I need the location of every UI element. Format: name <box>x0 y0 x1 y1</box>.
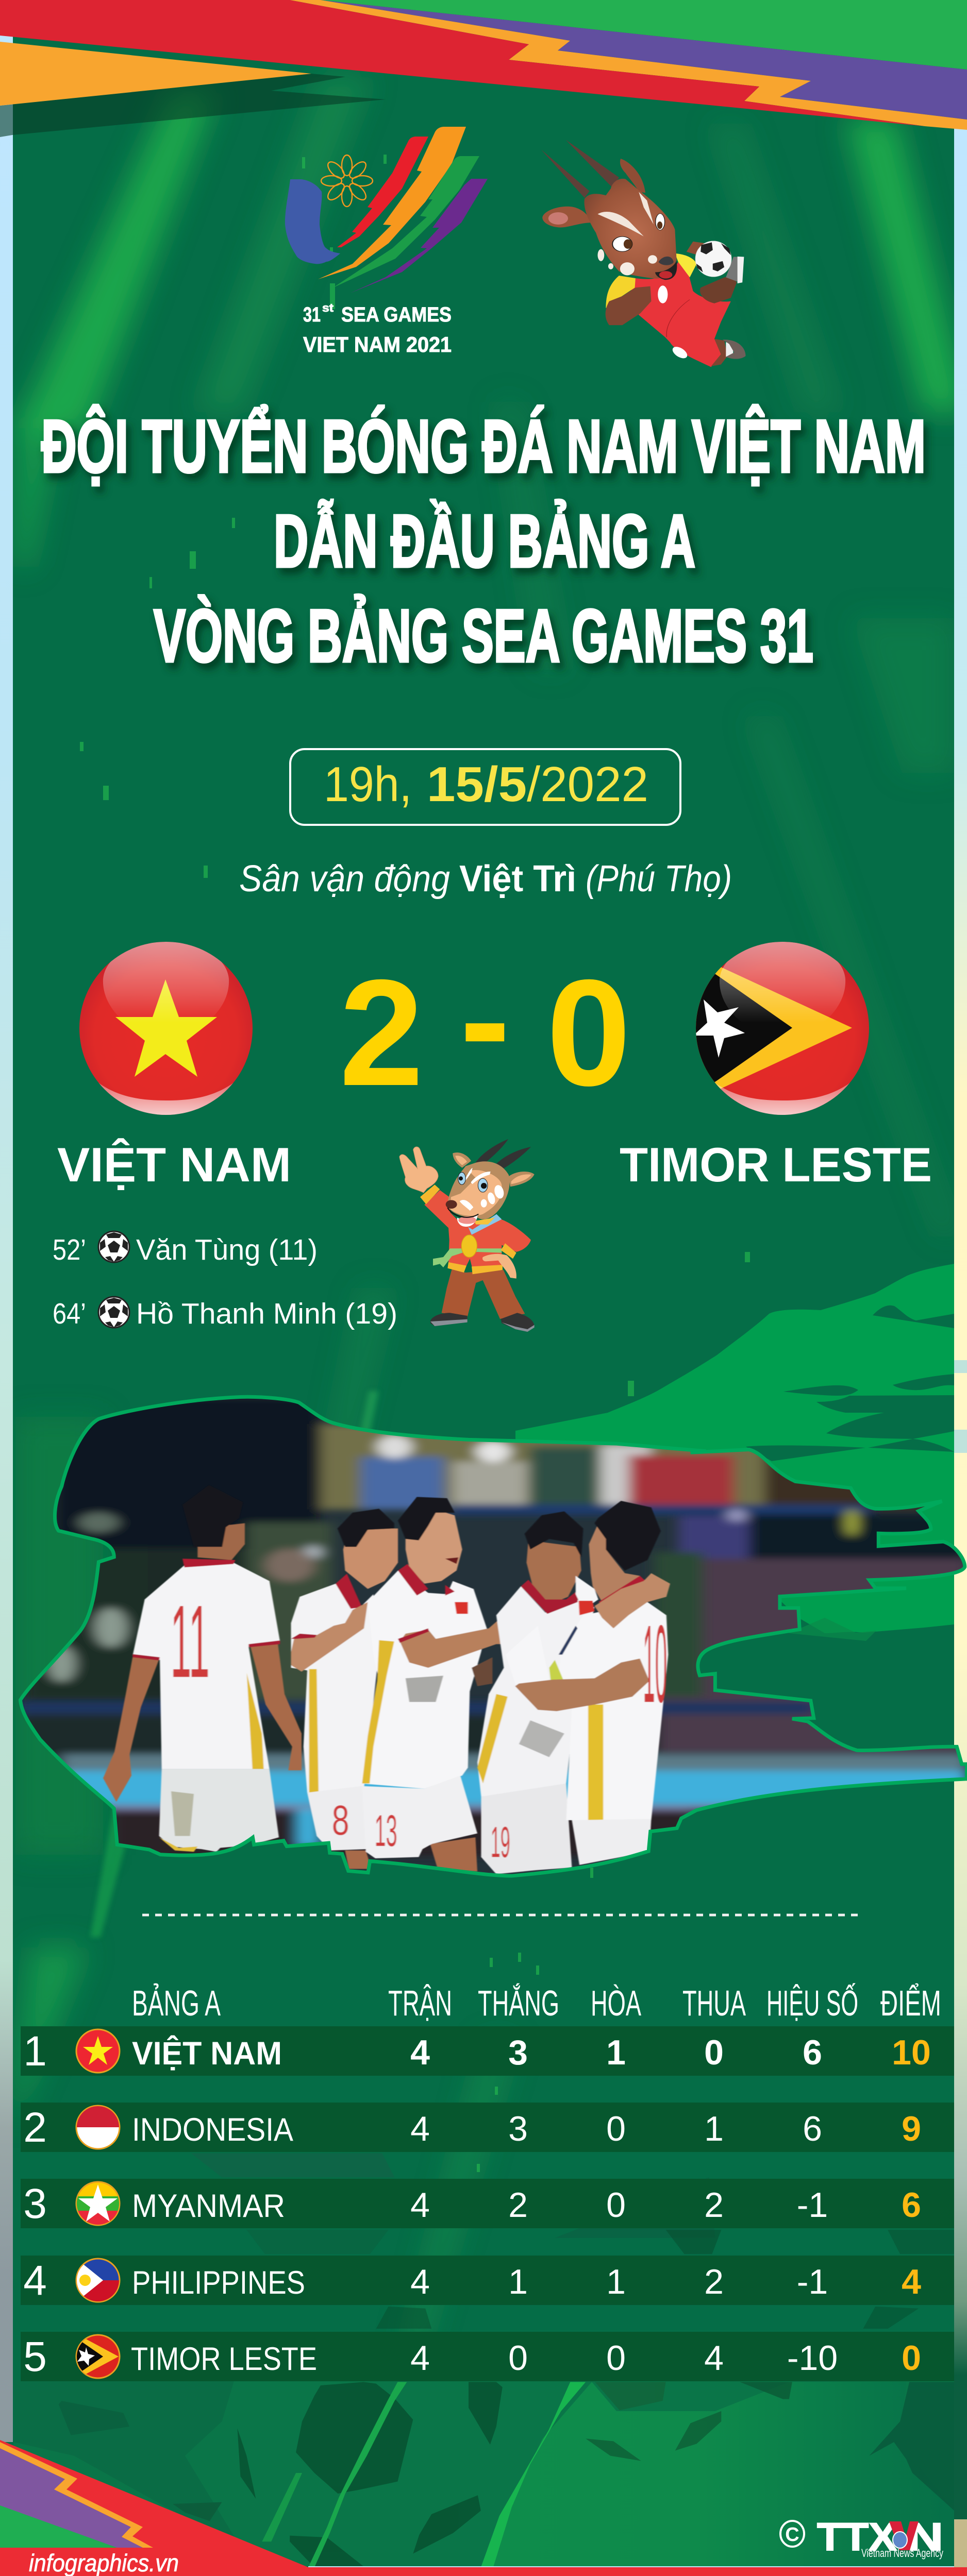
logo caption: 31 <box>303 303 321 326</box>
stadium line: Sân vận động <box>239 858 450 900</box>
sparkle specks <box>80 155 894 2172</box>
table row 4: Philippines: 4 <box>410 2262 430 2301</box>
flag: Timor Leste <box>691 942 871 1118</box>
team names: TIMOR LESTE <box>620 1138 932 1192</box>
table row 4: Philippines: 1 <box>606 2262 626 2301</box>
table row 1: Việt Nam: 6 <box>803 2033 822 2072</box>
SEA Games 31 logo <box>285 127 488 357</box>
table row 2: Indonesia: 4 <box>410 2109 430 2148</box>
table row 5: Timor Leste: 0 <box>606 2338 626 2378</box>
table row 3: Myanmar: MYANMAR <box>132 2188 285 2224</box>
standings table header <box>132 1982 941 2023</box>
standings table header: BẢNG A <box>132 1983 221 2023</box>
table row 1: Việt Nam: 10 <box>892 2033 931 2072</box>
standings table header: THUA <box>682 1983 746 2023</box>
icon: football <box>98 1231 129 1262</box>
mascot kit <box>630 262 731 367</box>
score: - <box>460 935 510 1104</box>
table row 1: Việt Nam: 3 <box>508 2033 528 2072</box>
table row 2: Indonesia: 6 <box>803 2109 822 2148</box>
table row 3: Myanmar: 4 <box>410 2185 430 2225</box>
icon: Vietnam flag <box>76 2029 120 2073</box>
player 19: 19 <box>491 1818 510 1867</box>
logo caption: VIET NAM 2021 <box>303 332 452 357</box>
stadium line: (Phú Thọ) <box>586 858 732 900</box>
scorers list: Hồ Thanh Minh (19) <box>136 1297 397 1330</box>
photo: team celebrating, drawn in blurred shapes: 10 <box>643 1602 667 1726</box>
right side light-green mountain backdrop for photo <box>515 1264 954 1641</box>
table row 4: Philippines <box>21 2256 954 2305</box>
bottom ribbon shapes <box>0 2440 967 2576</box>
table row 2: Indonesia <box>21 2103 954 2152</box>
logo caption: SEA GAMES <box>341 303 452 326</box>
icon: football second goal <box>98 1297 129 1328</box>
table row 1: Việt Nam: VIỆT NAM <box>132 2035 282 2072</box>
icon: Philippines flag <box>76 2259 120 2302</box>
match date box: 15/5 <box>427 757 527 812</box>
table row 1: Việt Nam: 0 <box>704 2033 724 2072</box>
TTXVN logo <box>780 2515 943 2560</box>
table row 4: Philippines: 2 <box>704 2262 724 2301</box>
table row 5: Timor Leste: 0 <box>902 2338 921 2378</box>
table row 3: Myanmar: 6 <box>902 2185 921 2225</box>
player 8 <box>291 1509 398 1869</box>
table row 2: Indonesia: INDONESIA <box>132 2112 293 2148</box>
match date box: /2022 <box>527 757 648 812</box>
table row 5: Timor Leste: TIMOR LESTE <box>131 2341 317 2377</box>
table row 2: Indonesia: 3 <box>508 2109 528 2148</box>
table row 1: Việt Nam <box>21 2026 954 2076</box>
standings table header: TRẬN <box>388 1983 452 2023</box>
table row 5: Timor Leste: -10 <box>787 2338 838 2378</box>
TTXVN logo: C <box>785 2524 799 2546</box>
score: 0 <box>546 948 631 1117</box>
scorers list: 64’ <box>53 1297 86 1330</box>
mascot head <box>584 179 677 279</box>
source: infographics.vn: infographics.vn <box>29 2549 179 2576</box>
standings table header: THẮNG <box>478 1982 559 2023</box>
standings table header: HIỆU SỐ <box>766 1982 858 2023</box>
table row 4: Philippines: 1 <box>508 2262 528 2301</box>
table row 2: Indonesia: 1 <box>704 2109 724 2148</box>
table row 1: Việt Nam: 4 <box>410 2033 430 2072</box>
football texture between table rows <box>191 2153 954 2329</box>
table row 5: Timor Leste <box>21 2332 954 2381</box>
player 10 <box>515 1501 670 1865</box>
photo players <box>103 1485 670 1874</box>
TTXVN logo: TTX <box>817 2515 897 2559</box>
player 13: 13 <box>375 1806 397 1856</box>
table row 2: Indonesia: 0 <box>606 2109 626 2148</box>
table row 5: Timor Leste: 4 <box>410 2338 430 2378</box>
logo caption <box>303 301 452 357</box>
table row 4: Philippines: 4 <box>23 2257 47 2304</box>
standings table header: HÒA <box>591 1983 641 2023</box>
player 19 <box>472 1512 594 1874</box>
stadium line <box>239 858 732 900</box>
lower football texture <box>13 2380 954 2569</box>
table row 5: Timor Leste: 0 <box>508 2338 528 2378</box>
table row 1: Việt Nam: 1 <box>606 2033 626 2072</box>
table row 5: Timor Leste: 5 <box>23 2333 47 2380</box>
photo: team celebrating, drawn in blurred shapes <box>0 1391 966 1884</box>
logo caption: st <box>322 301 334 314</box>
stadium line: Việt Trì <box>459 858 576 900</box>
table row 3: Myanmar: 0 <box>606 2185 626 2225</box>
title <box>41 404 926 677</box>
player 13 <box>360 1497 545 1872</box>
table row 1: Việt Nam: 1 <box>23 2028 47 2075</box>
photo background crowd <box>19 1398 966 1856</box>
table row 5: Timor Leste: 4 <box>704 2338 724 2378</box>
scorers list <box>53 1231 397 1330</box>
mascot kicking football <box>541 140 746 367</box>
table row 2: Indonesia: 2 <box>23 2104 47 2151</box>
player 11 <box>103 1485 302 1852</box>
mascot with medal <box>399 1139 535 1332</box>
table row 4: Philippines: -1 <box>797 2262 828 2301</box>
table row 3: Myanmar: 2 <box>704 2185 724 2225</box>
match date box <box>290 749 680 825</box>
icon: Myanmar flag <box>76 2182 120 2226</box>
player 11: 11 <box>171 1584 210 1699</box>
table row 2: Indonesia: 9 <box>902 2109 921 2148</box>
flag: Vietnam <box>77 942 255 1118</box>
table row 3: Myanmar: 2 <box>508 2185 528 2225</box>
table row 4: Philippines: 4 <box>902 2262 921 2301</box>
scorers list: 52’ <box>53 1233 86 1266</box>
table row 3: Myanmar: 3 <box>23 2180 47 2227</box>
top ribbon shapes <box>0 0 967 137</box>
team names: VIỆT NAM <box>57 1138 291 1192</box>
scorers list: Văn Tùng (11) <box>136 1233 318 1266</box>
table row 4: Philippines: PHILIPPINES <box>132 2265 305 2301</box>
title: DẪN ĐẦU BẢNG A <box>274 499 695 583</box>
team names <box>57 1138 932 1192</box>
score: 2 <box>339 948 424 1117</box>
table row 3: Myanmar <box>21 2179 954 2228</box>
icon: Indonesia flag <box>76 2106 120 2149</box>
logo lotus emblem <box>321 155 373 207</box>
player 8: 8 <box>332 1797 349 1844</box>
mascot football <box>695 241 731 277</box>
match date box: 19h, <box>324 757 412 812</box>
TTXVN logo: N <box>907 2515 943 2559</box>
table row 3: Myanmar: -1 <box>797 2185 828 2225</box>
score <box>339 935 631 1117</box>
icon: Timor Leste flag <box>76 2334 120 2379</box>
